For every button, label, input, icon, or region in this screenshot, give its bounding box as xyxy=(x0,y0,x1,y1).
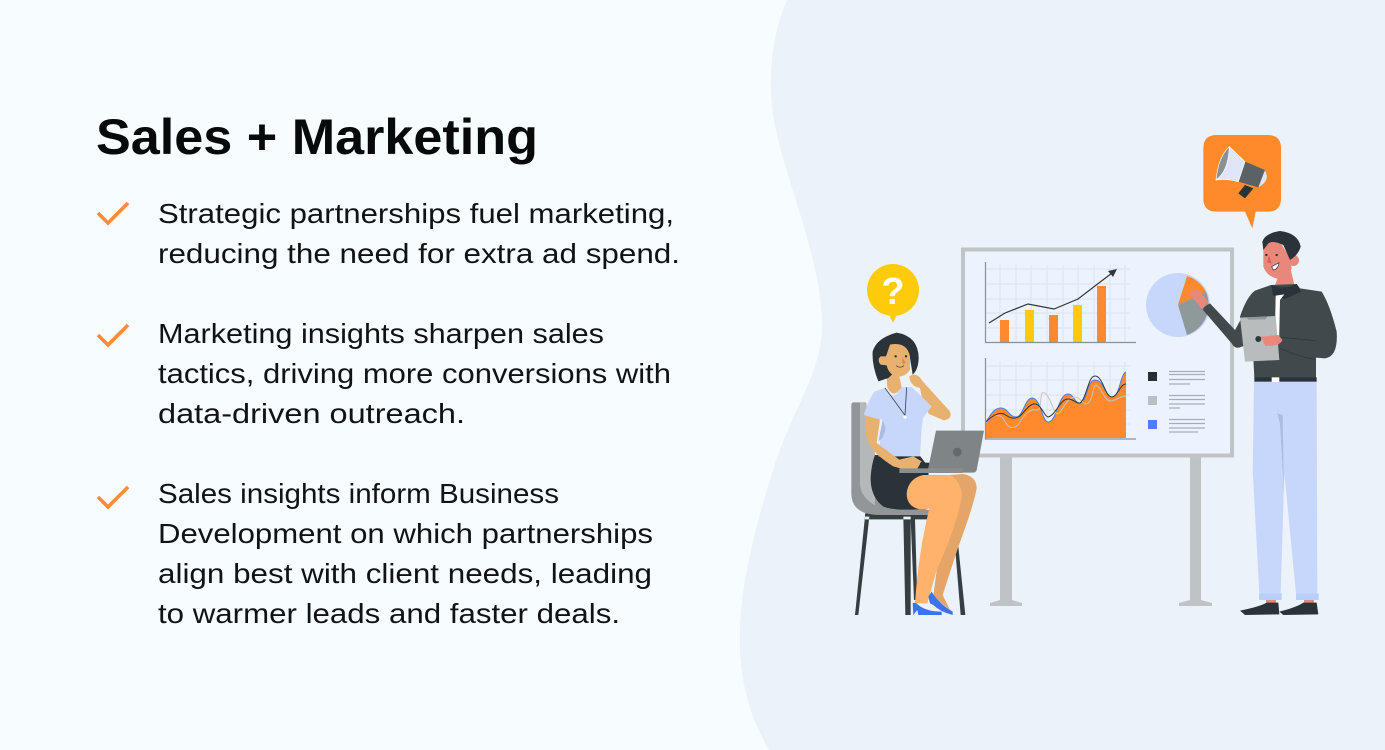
bullet 2 text: data-driven outreach. xyxy=(158,398,465,429)
pointing hand xyxy=(1188,288,1208,309)
crossed legs xyxy=(907,474,977,610)
collar xyxy=(1271,284,1301,299)
bullet 1 text xyxy=(158,198,680,269)
shirt xyxy=(1240,284,1337,378)
neck xyxy=(1275,267,1294,289)
chart legend xyxy=(1148,372,1205,432)
chair and legs xyxy=(851,402,977,615)
icon: question speech bubble: ? xyxy=(881,271,905,313)
bullet 3 xyxy=(98,478,653,629)
bullet 1 text: reducing the need for extra ad spend. xyxy=(158,238,680,269)
bullet 3 text xyxy=(158,478,653,629)
bubble xyxy=(1203,135,1281,228)
title: Sales + Marketing xyxy=(96,109,538,165)
board frame xyxy=(963,250,1232,456)
bullet 2 text xyxy=(158,318,671,429)
illustration: presentation board xyxy=(963,250,1232,606)
chair xyxy=(851,402,965,615)
laptop xyxy=(899,431,984,473)
skirt xyxy=(871,455,929,510)
bullet 1 xyxy=(98,198,680,269)
torso and head xyxy=(864,333,951,470)
bar chart with trend line xyxy=(986,262,1136,342)
bullet 2 text: tactics, driving more conversions with xyxy=(158,358,671,389)
hand on tablet xyxy=(1261,335,1282,346)
bullet 1 text: Strategic partnerships fuel marketing, xyxy=(158,198,674,229)
sleeve creases xyxy=(1280,337,1316,359)
illustration: standing man with tablet xyxy=(1188,231,1337,615)
icon: check 3 xyxy=(98,487,128,507)
head xyxy=(873,333,919,381)
area chart xyxy=(986,358,1136,439)
pie chart xyxy=(1146,273,1210,337)
bullet 2 text: Marketing insights sharpen sales xyxy=(158,318,604,349)
icon: check 1 xyxy=(98,203,128,223)
raised arm xyxy=(909,375,951,420)
lower arm and hand xyxy=(865,415,922,470)
tie xyxy=(1275,294,1284,345)
bullet 3 text: align best with client needs, leading xyxy=(158,558,652,589)
shoes xyxy=(913,592,953,615)
necklace xyxy=(885,387,907,415)
bullet 2 xyxy=(98,318,671,429)
illustration: seated woman with laptop xyxy=(851,333,984,615)
background blob panel xyxy=(740,0,1385,750)
bullet list xyxy=(98,198,680,629)
head xyxy=(1262,231,1301,279)
pointing arm xyxy=(1202,293,1257,348)
icon: megaphone speech bubble xyxy=(1203,135,1281,228)
upper body xyxy=(1240,231,1337,382)
tablet xyxy=(1240,316,1279,362)
icon: check 2 xyxy=(98,325,128,345)
board legs xyxy=(990,457,1212,606)
bullet 3 text: to warmer leads and faster deals. xyxy=(158,598,620,629)
bullet 3 text: Development on which partnerships xyxy=(158,518,653,549)
icon: question speech bubble xyxy=(867,264,919,323)
neck xyxy=(886,370,902,393)
bullet 3 text: Sales insights inform Business xyxy=(158,478,559,509)
blouse xyxy=(864,387,932,456)
blouse shadow xyxy=(878,420,886,441)
megaphone xyxy=(1216,147,1267,198)
belt xyxy=(1254,377,1317,382)
trousers and shoes xyxy=(1240,382,1319,615)
